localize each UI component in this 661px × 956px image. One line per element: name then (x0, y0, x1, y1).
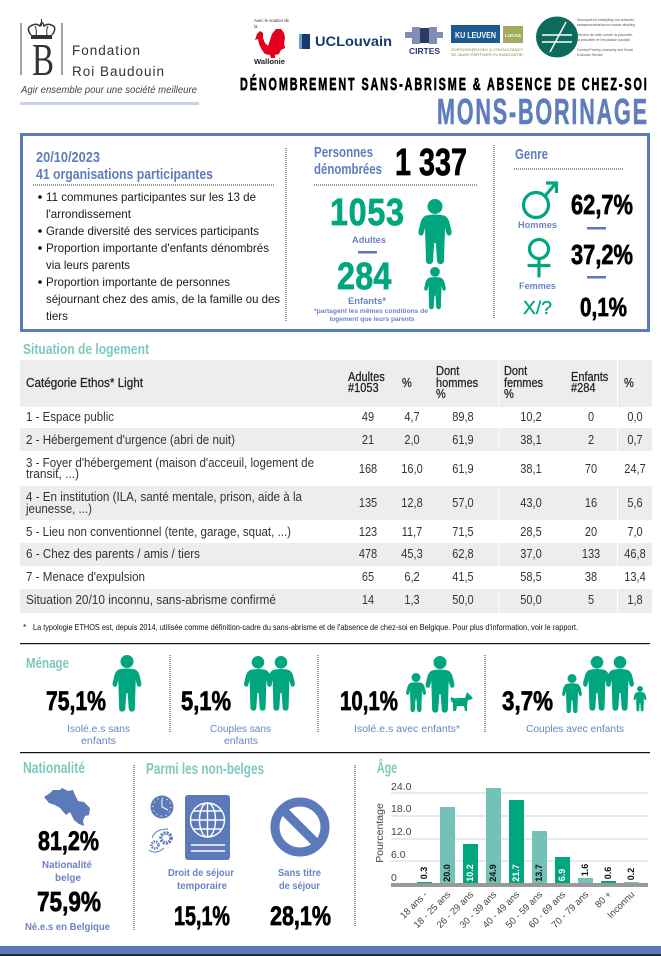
logo: KU Leuven LUCAS (451, 25, 524, 57)
household: couples with children: 3,7% (502, 686, 553, 716)
row 2: 2 (588, 433, 594, 447)
gender heading: Genre (515, 146, 548, 163)
panel: key figures (22, 134, 648, 330)
row 6: 46,8 (624, 547, 646, 561)
row 5: 11,7 (402, 525, 422, 539)
row 1 (26, 410, 643, 424)
logo: Fondation Roi Baudouin: Roi Baudouin (72, 64, 164, 79)
logo: CIRTES (405, 27, 443, 56)
persons counted: Personnes (314, 144, 373, 161)
row 4 (25, 490, 643, 516)
logo: CIRTES: CIRTES (409, 46, 440, 56)
stat: Belgian nationality: Nationalité (42, 860, 92, 871)
bullet list: Proportion importante de personnes (46, 276, 230, 289)
logo: Wallonie: Wallonie (254, 57, 285, 66)
men: 62,7% (571, 189, 633, 220)
children: *partagent les mêmes conditions de (314, 308, 429, 315)
row 3: 70 (585, 462, 598, 476)
table header: hommes (436, 376, 478, 390)
row 5: 71,5 (452, 525, 474, 539)
row 3: 38,1 (520, 462, 542, 476)
logo: Service de lutte contre la pauvreté (536, 16, 635, 58)
bar chart: age: 80 + (593, 889, 614, 910)
row 2: 0,7 (627, 433, 643, 447)
logo: Wallonie (254, 18, 290, 66)
adults (330, 192, 404, 254)
bar chart: age: 6.9 (557, 869, 567, 881)
row 4: 43,0 (520, 496, 542, 510)
bullet list: Proportion importante d'enfants dénombrés (46, 242, 269, 255)
row 7: 7 - Menace d'expulsion (26, 570, 145, 584)
footnote: * (23, 622, 27, 632)
row 2 (26, 433, 643, 447)
women (519, 239, 633, 292)
row 3: 24,7 (624, 462, 646, 476)
icon: dog (451, 692, 473, 711)
stat: temporary residence: 15,1% (174, 901, 230, 931)
logo: Service de lutte contre la pauvreté: Service de lutte contre la pauvreté, (577, 33, 633, 37)
table header: Dont (436, 364, 460, 378)
row 3 (26, 456, 646, 481)
women: 37,2% (571, 239, 633, 270)
row 8: 14 (362, 593, 375, 607)
table header: #284 (571, 381, 596, 395)
date and organisations (36, 149, 213, 183)
date and organisations: 41 organisations participantes (36, 166, 213, 183)
row 3: 61,9 (452, 462, 474, 476)
row 7: 41,5 (452, 570, 474, 584)
footnote: La typologie ETHOS est, depuis 2014, utilisée comme définition-cadre du sans-abrisme et de l'absence de chez-soi en Belgique. Pour plus d'information, voir le rapport. (33, 622, 578, 632)
unknown gender: X/? (523, 298, 552, 318)
stat: born in Belgium: Né.e.s en Belgique (25, 922, 110, 933)
heading: nationality: Nationalité (23, 760, 85, 777)
household: single with children: Isolé.e.s avec enfants* (354, 724, 460, 735)
row 5: 7,0 (627, 525, 643, 539)
heading: age: Âge (377, 758, 397, 777)
table header: Catégorie Ethos* Light (26, 376, 143, 390)
row 4: 12,8 (401, 496, 423, 510)
row 3: 16,0 (401, 462, 423, 476)
row 6: 133 (582, 547, 601, 561)
persons counted (314, 142, 467, 184)
bar chart: age: 6.0 (391, 849, 406, 861)
row 2: 38,1 (520, 433, 542, 447)
row 7: 38 (585, 570, 598, 584)
logo: Service de lutte contre la pauvreté: Combat Poverty, Insecurity and Social (577, 48, 633, 52)
row 1: 1 - Espace public (26, 410, 114, 424)
title: DÉNOMBREMENT SANS-ABRISME & ABSENCE DE CHEZ-SOI (240, 74, 647, 95)
table header: % (624, 376, 634, 390)
stat: no residence permit: 28,1% (270, 901, 331, 931)
logo: Fondation Roi Baudouin: Fondation (72, 43, 140, 58)
bar chart: age (374, 781, 648, 931)
bar chart: age: 24.9 (488, 864, 498, 882)
icon: prohibited (275, 802, 325, 852)
household: couples with children: Couples avec enfants (526, 724, 624, 735)
icon: female (529, 240, 549, 276)
bar chart: age: 40 - 49 ans (481, 889, 522, 931)
heading: housing situation: Situation de logement (23, 341, 149, 358)
row 5: 28,5 (520, 525, 542, 539)
table header: #1053 (348, 381, 379, 395)
stat: Belgian nationality: belge (55, 873, 81, 884)
row 8: 1,3 (404, 593, 420, 607)
row 8: 50,0 (452, 593, 474, 607)
logo: Wallonie: Avec le soutien de (254, 18, 290, 23)
unknown gender (523, 292, 627, 322)
stat: temporary residence: Droit de séjour (168, 868, 234, 879)
row 7: 13,4 (624, 570, 646, 584)
household: single without children: Isolé.e.s sans (67, 724, 130, 735)
table header: % (504, 387, 514, 401)
logo: UCLouvain: UCLouvain (315, 34, 392, 49)
row 5 (26, 525, 643, 539)
household: single without children (46, 655, 141, 747)
children: Enfants* (348, 296, 386, 307)
row 8: 1,8 (627, 593, 643, 607)
stat: born in Belgium: 75,9% (37, 886, 101, 917)
bullet list: l'arrondissement (46, 208, 132, 221)
row 8 (26, 593, 643, 607)
unknown gender: 0,1% (580, 292, 627, 322)
stat: no residence permit (270, 868, 331, 931)
table header: % (436, 387, 446, 401)
logo: KU Leuven LUCAS: KU LEUVEN (455, 31, 496, 40)
bar chart: age: 13.7 (534, 864, 544, 882)
table header: Adultes (348, 370, 385, 384)
logo: Fondation Roi Baudouin: Agir ensemble pour une société meilleure (20, 84, 197, 96)
bar chart: age: 10.2 (465, 864, 475, 882)
row 4: 57,0 (452, 496, 474, 510)
bar chart: age: 0.6 (603, 867, 613, 879)
logo: KU Leuven LUCAS: ZORGONDERZOEK & CONSULTANCY (451, 48, 523, 52)
logo: Wallonie: la (254, 24, 258, 29)
table header: % (402, 376, 412, 390)
row 6: 6 - Chez des parents / amis / tiers (26, 547, 200, 561)
row 7 (26, 570, 646, 584)
persons counted: 1 337 (395, 142, 467, 184)
table header: Enfants (571, 370, 608, 384)
household: couples without children: Couples sans (210, 724, 271, 735)
men (518, 189, 633, 231)
logo: KU Leuven LUCAS: 30 JAAR PARTNER IN INNOVATIE (451, 53, 524, 57)
row 7: 58,5 (520, 570, 542, 584)
bar chart: age: Inconnu (605, 889, 637, 921)
row 4: 135 (359, 496, 378, 510)
bar chart: age: 50 - 59 ans (504, 889, 545, 931)
stat: temporary residence: temporaire (177, 881, 227, 892)
icon: passport (185, 795, 230, 860)
household: single with children (340, 656, 473, 735)
row 4: jeunesse, ...) (25, 502, 92, 516)
household: single without children: enfants (81, 736, 116, 747)
row 1: 10,2 (520, 410, 542, 424)
subtitle: Mons-Borinage: MONS-BORINAGE (437, 92, 647, 132)
icon: child (424, 267, 446, 309)
row 3: transit, ...) (26, 467, 79, 481)
date and organisations: 20/10/2023 (36, 149, 100, 166)
icon: male (524, 183, 556, 218)
bar chart: age: 70 - 79 ans (550, 889, 591, 931)
household: single without children: 75,1% (46, 686, 106, 716)
icon: gears (149, 829, 171, 852)
women: Femmes (519, 281, 556, 292)
children: logement que leurs parents (330, 316, 415, 323)
row 2: 21 (362, 433, 374, 447)
icon: adult (418, 199, 452, 264)
bar chart: age: 18 ans - (398, 889, 430, 921)
row 2: 2 - Hébergement d'urgence (abri de nuit) (26, 433, 235, 447)
bullet list: tiers (46, 310, 68, 323)
table: housing situation (20, 360, 652, 613)
persons counted: dénombrées (314, 161, 382, 178)
household: single with children: 10,1% (340, 686, 398, 716)
children: 284 (337, 256, 392, 298)
household: couples without children: 5,1% (181, 686, 231, 716)
row 8: 50,0 (520, 593, 542, 607)
bullet list: séjournant chez des amis, de la famille ou des (46, 293, 280, 306)
stat: Belgian nationality: 81,2% (38, 826, 99, 856)
row 4: 4 - En institution (ILA, santé mentale, prison, aide à la (26, 490, 302, 504)
row 6: 37,0 (520, 547, 542, 561)
panel: nationality (23, 760, 110, 933)
row 2: 2,0 (404, 433, 420, 447)
stat: no residence permit: de séjour (279, 881, 320, 892)
table header (26, 364, 634, 401)
bar chart: age: 20.0 (442, 864, 452, 882)
bar chart: age: 0.2 (626, 868, 636, 880)
row 1: 49 (362, 410, 374, 424)
household: couples without children (181, 656, 295, 747)
row 6: 478 (359, 547, 378, 561)
row 4: 16 (585, 496, 598, 510)
row 6: 62,8 (452, 547, 474, 561)
stat: born in Belgium (25, 886, 110, 933)
row 5: 20 (585, 525, 598, 539)
household: couples with children (502, 656, 646, 735)
row 5: 123 (359, 525, 378, 539)
stat: temporary residence (168, 868, 234, 931)
logo: Service de lutte contre la pauvreté: Steunpunt tot bestrijding van armoede, (577, 18, 635, 22)
table header: femmes (504, 376, 543, 390)
adults: 1053 (330, 192, 404, 234)
stat: Belgian nationality (38, 826, 99, 884)
logo: Fondation Roi Baudouin: B (32, 34, 54, 85)
household: couples without children: enfants (224, 736, 258, 747)
panel: household (26, 655, 646, 747)
row 1: 0,0 (627, 410, 643, 424)
bar chart: age: 18 - 25 ans (412, 889, 453, 931)
row 8: 5 (588, 593, 594, 607)
row 1: 4,7 (404, 410, 420, 424)
bullet list: 11 communes participantes sur les 13 de (46, 191, 256, 204)
bar chart: age: Pourcentage (374, 803, 386, 863)
bar chart: age: 0 (391, 872, 397, 884)
bar chart: age: 30 - 39 ans (458, 889, 499, 931)
row 6: 45,3 (401, 547, 423, 561)
logo: KU Leuven LUCAS: LUCAS (505, 33, 521, 38)
logo: Service de lutte contre la pauvreté: bestaansonzekerheid en sociale uitsluiting (577, 23, 635, 27)
bullet list: via leurs parents (46, 259, 130, 272)
row 6 (26, 547, 646, 561)
row 7: 6,2 (404, 570, 420, 584)
row 7: 65 (362, 570, 375, 584)
row 4: 5,6 (627, 496, 643, 510)
heading: household: Ménage (26, 655, 69, 672)
bar chart: age: 21.7 (511, 864, 521, 882)
bar chart: age: 24.0 (391, 781, 412, 793)
children (314, 256, 429, 323)
row 2: 61,9 (452, 433, 474, 447)
bar chart: age: 26 - 29 ans (435, 889, 476, 931)
bullet list (38, 191, 280, 323)
logo: Service de lutte contre la pauvreté: Exclusion Service (577, 53, 603, 57)
panel: among non-Belgians (146, 761, 331, 931)
row 5: 5 - Lieu non conventionnel (tente, garage, squat, ...) (26, 525, 291, 539)
bar chart: age: 12.0 (391, 826, 412, 838)
bullet list: Grande diversité des services participants (46, 225, 259, 238)
bar chart: age: 18.0 (391, 803, 412, 815)
bar chart: age: 0.3 (419, 867, 429, 879)
row 3: 3 - Foyer d'hébergement (maison d'acceuil, logement de (26, 456, 314, 470)
logo: Service de lutte contre la pauvreté: la précarité et l'exclusion sociale (577, 38, 630, 42)
bar chart: age: 60 - 69 ans (527, 889, 568, 931)
row 1: 0 (588, 410, 594, 424)
bar chart: age: 1.6 (580, 864, 590, 876)
row 3: 168 (359, 462, 378, 476)
row 1: 89,8 (452, 410, 474, 424)
heading: among non-Belgians: Parmi les non-belges (146, 761, 264, 778)
icon: clock (150, 796, 174, 818)
panel: age (374, 758, 648, 931)
men: Hommes (518, 220, 557, 231)
row 8: Situation 20/10 inconnu, sans-abrisme confirmé (26, 593, 276, 607)
adults: Adultes (352, 235, 386, 246)
logo: Fondation Roi Baudouin (20, 19, 199, 105)
table header: Dont (504, 364, 528, 378)
icon: Belgium map (44, 788, 90, 826)
stat: no residence permit: Sans titre (278, 868, 321, 879)
